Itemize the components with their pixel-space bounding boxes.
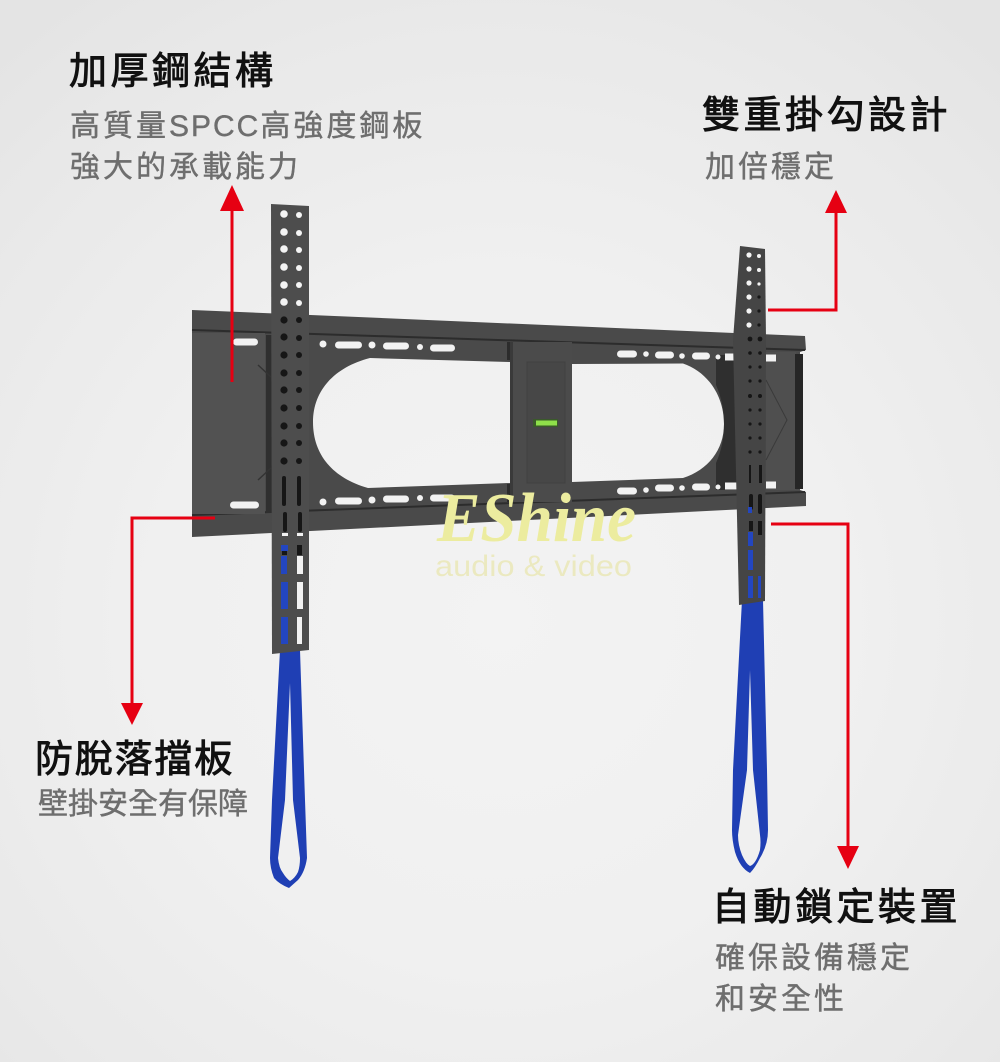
text block: thick steel: 強大的承載能力 [70,151,301,184]
right safety strap [732,600,768,873]
arrow: auto-lock callout [771,524,859,869]
text block: auto-lock device: 自動鎖定裝置 [712,887,961,929]
arrow: thick steel callout [220,185,244,382]
green lock indicator [533,419,558,427]
watermark: EShine [436,480,636,557]
right upright arm [733,246,766,605]
plate right panel [766,352,796,490]
text block: double hook [702,95,951,184]
text block: anti-drop plate: 壁掛安全有保障 [38,788,248,821]
text block: double hook: 加倍穩定 [705,151,837,184]
text block: thick steel: 高質量SPCC高強度鋼板 [70,110,425,143]
plate flange lines [192,330,805,515]
arrow: anti-drop plate callout [121,518,215,725]
text block: auto-lock device: 和安全性 [715,983,847,1016]
text block: thick steel [69,51,425,184]
text block: anti-drop plate: 防脫落擋板 [35,739,234,781]
wall plate [192,310,806,537]
watermark: audio & video [435,550,632,583]
plate mounting slots [230,338,776,508]
text block: double hook: 雙重掛勾設計 [702,95,951,137]
left safety strap [270,650,307,888]
text block: auto-lock device: 確保設備穩定 [715,942,913,975]
text block: anti-drop plate [35,739,248,821]
text block: auto-lock device [712,887,961,1016]
left upright arm [271,204,309,654]
plate left panel [192,333,265,514]
arrow: double hook callout [768,190,847,310]
text block: thick steel: 加厚鋼結構 [69,51,277,93]
center lock bracket [513,342,572,502]
